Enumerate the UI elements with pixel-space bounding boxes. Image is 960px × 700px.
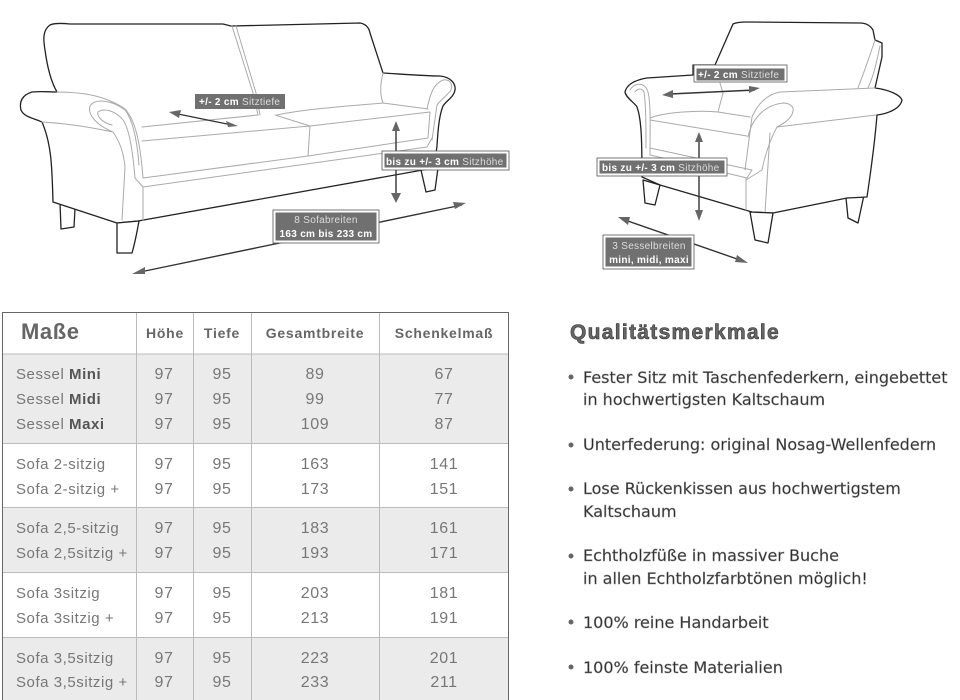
sofa back legs (60, 168, 438, 229)
table header (21, 319, 493, 344)
arrow: seat height (391, 121, 401, 203)
item 6: 100% feinste Materialien (583, 658, 783, 677)
rows: Sofa 2,5-sitzig: 95 (212, 545, 232, 562)
table header: Höhe (146, 325, 184, 341)
item 1: Fester Sitz mit Taschenfederkern, eingebettet (583, 368, 948, 387)
rows: Sofa 3sitzig: 95 (212, 610, 232, 627)
rows: Sessel: Sessel Maxi (16, 416, 105, 433)
arrow: chair width (618, 217, 748, 263)
rows: Sofa 3,5sitzig (16, 650, 458, 691)
sofa illustration (20, 23, 509, 274)
rows: Sofa 3sitzig: 181 (430, 585, 458, 602)
armchair body outline (625, 22, 902, 213)
rows: Sofa 2,5-sitzig: Sofa 2,5sitzig + (16, 545, 128, 562)
label: Sitzhöhe: bis zu +/- 3 cm Sitzhöhe (386, 157, 504, 168)
rows: Sofa 2,5-sitzig: 171 (430, 545, 458, 562)
rows: Sofa 2-sitzig: Sofa 2-sitzig + (16, 481, 120, 498)
rows: Sofa 2,5-sitzig: 161 (430, 520, 458, 537)
rows: Sessel: 97 (154, 391, 174, 408)
arrow: seat depth (169, 110, 238, 127)
label: Sesselbreiten (603, 235, 694, 269)
rows: Sessel: 89 (306, 366, 324, 383)
heading: Qualitätsmerkmale: Qualitätsmerkmale (570, 321, 780, 344)
item 3 (568, 479, 901, 521)
rows: Sessel: 95 (212, 391, 232, 408)
item 4: in allen Echtholzfarbtönen möglich! (583, 569, 868, 588)
row backgrounds (3, 354, 508, 700)
rows: Sessel: 67 (434, 366, 454, 383)
armchair front leg (750, 212, 773, 243)
rows: Sofa 2,5-sitzig: 95 (212, 520, 232, 537)
rows: Sofa 2-sitzig: 95 (212, 456, 232, 473)
rows: Sofa 2,5-sitzig (16, 520, 458, 562)
rows: Sessel: Sessel Midi (16, 391, 101, 408)
rows: Sessel (16, 366, 454, 433)
label: Sesselbreiten: mini, midi, maxi (609, 255, 689, 266)
rows: Sofa 3sitzig: 213 (301, 610, 329, 627)
rows: Sofa 2,5-sitzig: 97 (154, 545, 174, 562)
item 3: Kaltschaum (583, 502, 677, 521)
rows: Sofa 3sitzig: 97 (154, 585, 174, 602)
label: Sitzhöhe (597, 158, 727, 176)
rows: Sofa 2-sitzig: 95 (212, 481, 232, 498)
rows: Sofa 2,5-sitzig: 193 (301, 545, 329, 562)
table header: Tiefe (204, 325, 240, 341)
rows: Sofa 3sitzig: Sofa 3sitzig (16, 585, 100, 602)
quality list (568, 368, 948, 677)
rows: Sofa 2-sitzig: 151 (430, 481, 458, 498)
rows: Sofa 3sitzig: 191 (430, 610, 458, 627)
rows: Sofa 3,5sitzig: 233 (301, 674, 329, 691)
table header: Gesamtbreite (266, 325, 364, 341)
rows: Sessel: 97 (154, 366, 174, 383)
rows: Sessel: 87 (434, 416, 454, 433)
armchair illustration (597, 22, 902, 269)
rows: Sofa 2-sitzig: 97 (154, 456, 174, 473)
item 5: 100% reine Handarbeit (583, 613, 769, 632)
item 4: Echtholzfüße in massiver Buche (583, 546, 839, 565)
label: Sitztiefe: +/- 2 cm Sitztiefe (199, 97, 280, 108)
arrow: sofa width (132, 202, 466, 274)
rows: Sofa 3,5sitzig: 95 (212, 650, 232, 667)
rows: Sofa 3sitzig: 203 (301, 585, 329, 602)
rows: Sofa 2,5-sitzig: 97 (154, 520, 174, 537)
rows: Sessel: 95 (212, 416, 232, 433)
rows: Sofa 3sitzig: 97 (154, 610, 174, 627)
label: Sofabreiten: 163 cm bis 233 cm (280, 229, 372, 240)
rows: Sessel: Sessel Mini (16, 366, 101, 383)
item 2: Unterfederung: original Nosag-Wellenfedern (583, 435, 936, 454)
rows: Sofa 3,5sitzig: 201 (430, 650, 458, 667)
rows: Sofa 2-sitzig: 97 (154, 481, 174, 498)
rows: Sofa 3,5sitzig: Sofa 3,5sitzig (16, 650, 114, 667)
label: Sesselbreiten: 3 Sesselbreiten (612, 241, 686, 252)
rows: Sofa 3,5sitzig: 97 (154, 650, 174, 667)
rows: Sofa 2,5-sitzig: Sofa 2,5-sitzig (16, 520, 119, 537)
rows: Sessel: 99 (306, 391, 324, 408)
rows: Sofa 3,5sitzig: 97 (154, 674, 174, 691)
arrow: chair seat depth (662, 86, 760, 98)
label: Sofabreiten (273, 210, 379, 243)
label: Sitztiefe (195, 94, 285, 109)
armchair inner lines (630, 40, 880, 213)
rows: Sofa 3sitzig: 95 (212, 585, 232, 602)
rows: Sessel: 97 (154, 416, 174, 433)
arrow: chair seat height (695, 132, 703, 221)
item 1: in hochwertigsten Kaltschaum (583, 390, 825, 409)
rows: Sessel: 77 (434, 391, 454, 408)
rows: Sofa 2-sitzig (16, 456, 458, 498)
rows: Sofa 2-sitzig: 163 (301, 456, 329, 473)
sofa inner lines (42, 26, 452, 220)
rows: Sofa 3,5sitzig: Sofa 3,5sitzig + (16, 674, 128, 691)
rows: Sofa 2-sitzig: Sofa 2-sitzig (16, 456, 106, 473)
armchair back legs (643, 180, 864, 223)
rows: Sofa 3sitzig (16, 585, 458, 627)
table header: Schenkelmaß (395, 325, 493, 341)
table: Maße (2, 312, 508, 700)
sofa body outline (20, 23, 455, 223)
sofa leg front (117, 221, 139, 253)
rows: Sofa 2,5-sitzig: 183 (301, 520, 329, 537)
rows: Sofa 2-sitzig: 173 (301, 481, 329, 498)
rows: Sofa 2-sitzig: 141 (430, 456, 458, 473)
rows: Sofa 3sitzig: Sofa 3sitzig + (16, 610, 114, 627)
rows: Sessel: 95 (212, 366, 232, 383)
table header: Maße (21, 319, 80, 344)
item 4 (568, 546, 868, 588)
rows: Sofa 3,5sitzig: 95 (212, 674, 232, 691)
label: Sitztiefe (694, 65, 787, 82)
label: Sitztiefe: +/- 2 cm Sitztiefe (698, 70, 779, 81)
label: Sofabreiten: 8 Sofabreiten (294, 215, 358, 226)
rows: Sessel: 109 (301, 416, 329, 433)
label: Sitzhöhe (382, 151, 509, 170)
rows: Sofa 3,5sitzig: 223 (301, 650, 329, 667)
rows: Sofa 3,5sitzig: 211 (430, 674, 458, 691)
item 1 (568, 368, 948, 409)
item 3: Lose Rückenkissen aus hochwertigstem (583, 479, 901, 498)
label: Sitzhöhe: bis zu +/- 3 cm Sitzhöhe (602, 163, 720, 174)
